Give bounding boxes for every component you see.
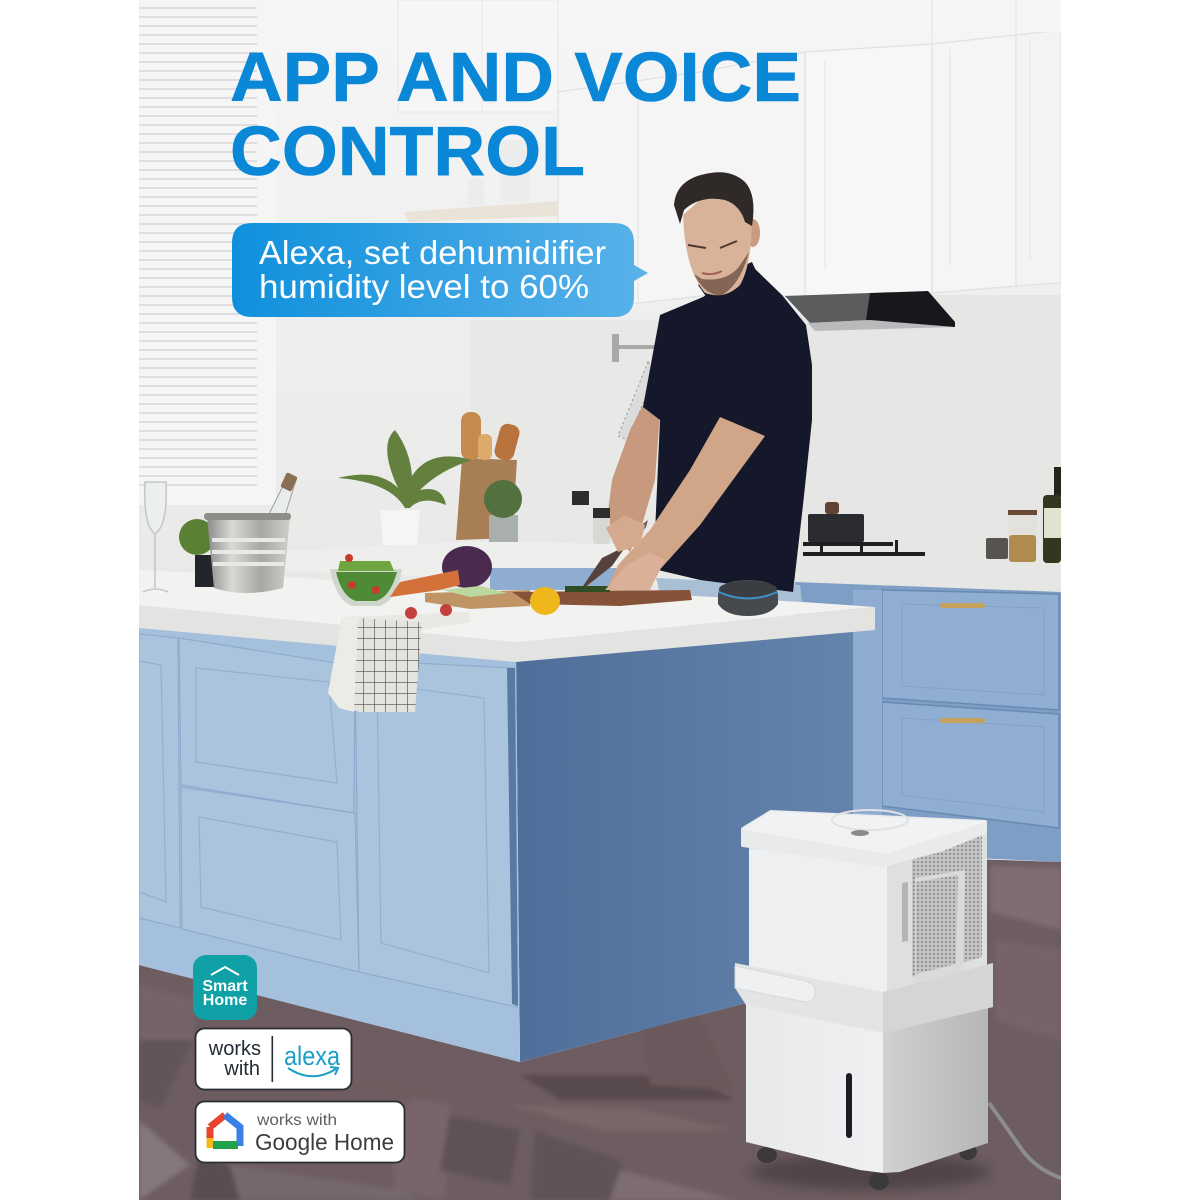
back countertop: [270, 541, 660, 585]
badge: works with alexa: [196, 1028, 352, 1090]
top cabinets above: [805, 0, 1061, 44]
gas stove: [803, 540, 925, 556]
wooden shelf: [404, 201, 558, 222]
left herb plant: [179, 519, 215, 587]
drawer lower: [882, 702, 1059, 828]
lid: [743, 810, 985, 865]
wall: [139, 0, 1061, 600]
gold handle lower: [940, 718, 985, 723]
man: legs: [656, 578, 802, 602]
lemon: [530, 587, 560, 615]
badge: works with google home: Google Home: [255, 1129, 394, 1155]
badge: works with alexa: alexa: [284, 1041, 341, 1071]
man: arm (right): [605, 417, 765, 592]
bread bag: [456, 412, 521, 540]
right cabinet wall: [795, 582, 1061, 862]
smart speaker: [718, 580, 778, 616]
title: CONTROL: [230, 112, 585, 190]
ice bucket and bottle: [204, 472, 298, 593]
man: arm (left): [606, 405, 660, 552]
spice jars: [986, 510, 1037, 562]
rear grille: [912, 833, 982, 977]
knife: [579, 520, 648, 592]
dark door gap: [507, 668, 518, 1006]
title: [230, 38, 801, 190]
back cabinets: [490, 568, 640, 590]
filter panel: [915, 870, 965, 983]
speech bubble: [232, 223, 648, 317]
speech bubble: humidity level to 60%: [259, 268, 589, 305]
wine glass: [143, 482, 168, 592]
dehumidifier: [735, 810, 1061, 1190]
salad bowl: [330, 554, 402, 606]
herringbone planks: [139, 865, 1061, 1200]
cutting board right: [512, 590, 692, 606]
badge: works with alexa: with: [223, 1058, 260, 1080]
towel rail: [612, 334, 656, 362]
window with blinds: [139, 0, 276, 505]
island front face: [139, 625, 520, 1062]
cucumbers: [442, 586, 507, 597]
badge: smart home: Smart: [202, 978, 248, 995]
water level window: [846, 1073, 852, 1138]
floor: [139, 855, 1061, 1200]
photo: kitchen scene: [139, 0, 1061, 1200]
badge: works with google home: [196, 1102, 404, 1162]
carrot: [390, 570, 460, 597]
badge: works with alexa: works: [208, 1038, 261, 1060]
range hood: [785, 291, 955, 331]
man: hand on knife: [606, 515, 645, 552]
casters: [757, 1144, 977, 1190]
strawberries and towel top: [345, 604, 470, 630]
hanging tea towel: [328, 617, 422, 712]
man: hand: [605, 552, 665, 590]
upper cabinets: [558, 30, 1061, 310]
lower body: [746, 1000, 988, 1173]
badge: smart home: Home: [203, 992, 247, 1009]
badge: smart home: [193, 955, 257, 1020]
man: head: [674, 172, 760, 305]
pepper mills: [572, 491, 610, 544]
icon: google home: [210, 1115, 240, 1148]
hanging towel: [618, 362, 656, 440]
small potted plant: [484, 480, 522, 542]
speech bubble: Alexa, set dehumidifier: [259, 234, 606, 271]
wall tones: [470, 295, 1061, 565]
upper body: [749, 833, 987, 996]
door inset panels: [139, 661, 489, 973]
faint upper cabinets behind title: [398, 0, 558, 112]
right countertop: [795, 556, 1061, 592]
olive oil bottle: [1043, 467, 1061, 563]
power cord: [989, 1103, 1061, 1178]
door fronts: [139, 634, 517, 1007]
shadow: [750, 1154, 990, 1190]
handle band: [735, 963, 993, 1033]
glasses on shelf: [468, 140, 530, 206]
cutting board left: [425, 590, 530, 609]
man: shirt: [643, 267, 812, 592]
pot on stove: [808, 502, 864, 542]
potted plant: [338, 430, 472, 545]
title: APP AND VOICE: [230, 38, 801, 116]
chopped greens: [565, 586, 610, 592]
cabbage: [442, 546, 492, 588]
countertop edge: [139, 605, 875, 662]
island right face: [516, 625, 853, 1062]
drawer upper: [882, 590, 1059, 710]
side slot: [902, 882, 908, 942]
island countertop: [139, 570, 875, 642]
badge: works with google home: works with: [256, 1112, 337, 1129]
right strip: [853, 590, 882, 852]
gold handle upper: [940, 603, 985, 608]
